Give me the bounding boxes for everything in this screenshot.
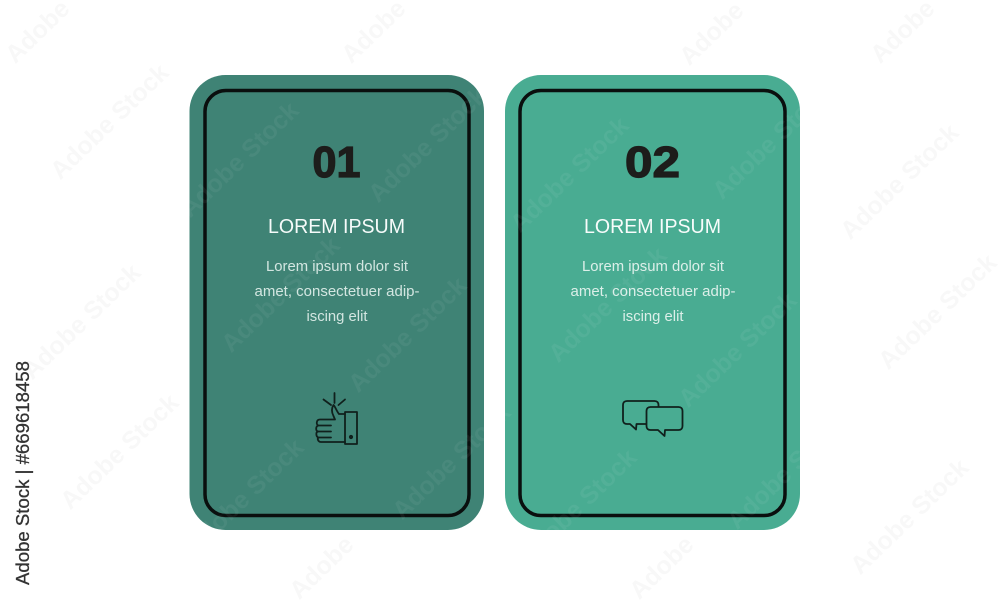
text: Adobe Stock [343,271,472,398]
text: Adobe Stock [175,96,304,223]
text: Adobe Stock [17,258,146,385]
panel: card 01 [190,75,484,530]
text: Adobe Stock [513,443,642,570]
text: Adobe Stock [845,453,974,580]
text: Adobe Stock [673,286,802,413]
number 02: 02 [625,138,680,187]
text: Adobe Stock [873,248,1000,375]
text block: card 01: Lorem ipsum dolor sit [266,259,408,275]
text: Adobe Stock [543,241,672,368]
inner border of card 02 [520,90,785,516]
panel: card 02 [505,75,800,530]
card 02 background [505,75,800,530]
text block: card 01: iscing elit [306,309,368,325]
text: Adobe Stock [180,433,309,560]
text: Adobe Stock [387,398,516,525]
inner border of card 01 [205,90,469,516]
text block: card 02: iscing elit [622,309,684,325]
text block: card 02 [570,259,736,325]
text: Adobe Stock [835,118,964,245]
card 01 background [190,75,484,530]
number 01: 01 [312,138,360,187]
text block: card 01: amet, consectetuer adip- [254,284,420,300]
text: Adobe Stock [707,78,836,205]
heading: card 01: LOREM IPSUM [268,216,405,238]
text block: card 01 [254,259,420,325]
heading: card 02: LOREM IPSUM [584,216,721,238]
text: Adobe Stock [505,111,634,238]
text: Adobe Stock [363,81,492,208]
text: Adobe Stock [45,58,174,185]
icon: speech bubbles [623,401,682,436]
text: Adobe Stock [216,231,345,358]
text: Adobe Stock [55,388,184,515]
text block: card 02: Lorem ipsum dolor sit [582,259,724,275]
text: Adobe Stock [722,408,851,535]
icon: thumbs up [316,393,357,444]
text block: card 02: amet, consectetuer adip- [570,284,736,300]
side credit: Adobe Stock | #669618458 [13,361,33,585]
